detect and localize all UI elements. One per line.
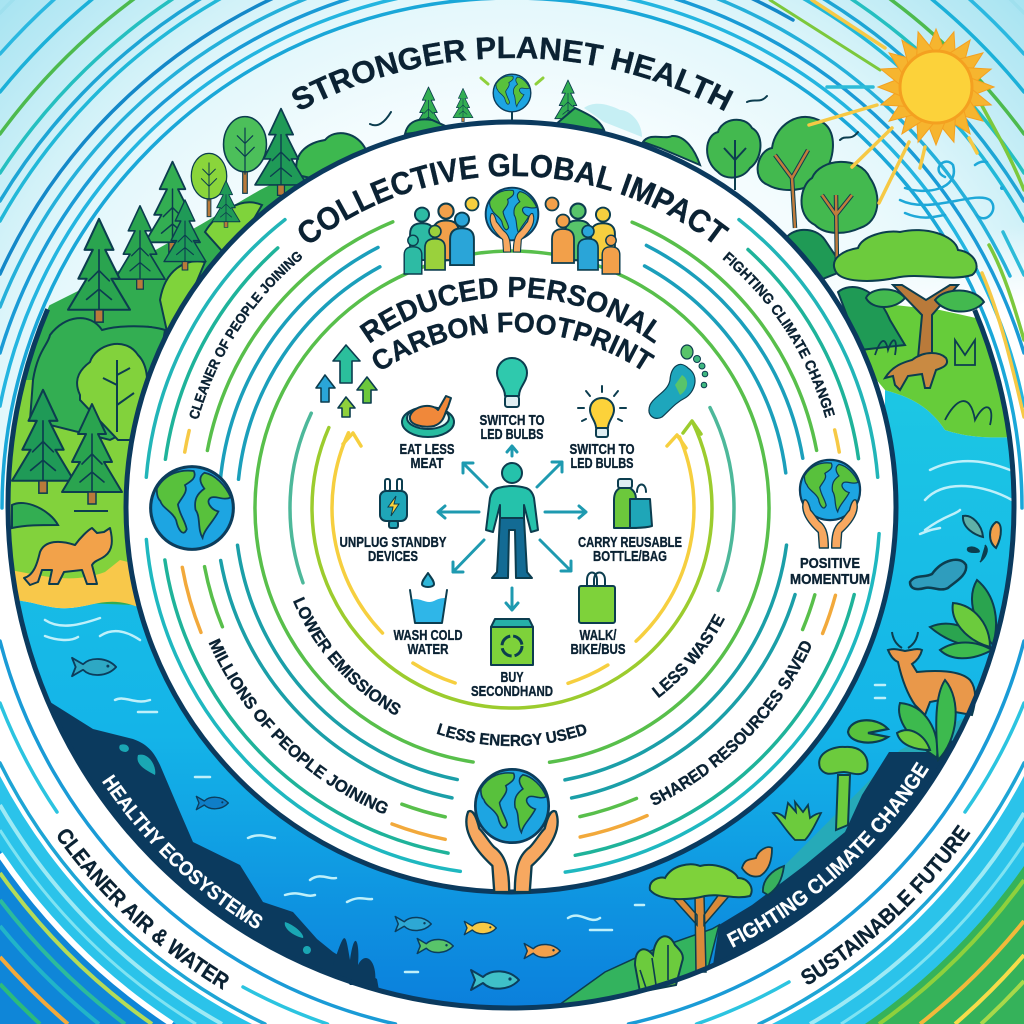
arc arrowheads — [343, 421, 701, 448]
label: carry reusable bottle/bag: CARRY REUSABLE — [578, 534, 682, 551]
label: eat less meat: MEAT — [410, 455, 444, 472]
icon: person — [486, 463, 538, 578]
sand shore — [14, 560, 136, 608]
lily pad — [848, 720, 888, 743]
label: switch to led bulbs right: SWITCH TO — [570, 441, 635, 458]
mushroom tree — [836, 775, 850, 830]
ring label: cleaner air and water: CLEANER AIR & WATER — [58, 829, 229, 990]
seaweed — [333, 938, 375, 985]
icon: top globe on tree — [481, 74, 543, 122]
acacia bottom — [670, 890, 730, 972]
land right slope — [760, 718, 964, 890]
forest base — [20, 178, 306, 605]
right wildlife and plants — [24, 516, 1001, 992]
upper leaves — [930, 580, 996, 658]
water — [0, 390, 1024, 1024]
label: switch to led bulbs right: LED BULBS — [570, 455, 634, 472]
label: walk bike bus: BIKE/BUS — [570, 641, 626, 658]
label: wash cold water — [394, 627, 463, 658]
label: positive momentum: MOMENTUM — [790, 571, 870, 588]
ring label: lower emissions: LOWER EMISSIONS — [293, 596, 401, 715]
meadow lime base — [10, 380, 130, 578]
acacia tree — [893, 285, 958, 358]
marine shapes — [963, 516, 983, 537]
label: wash cold water: WASH COLD — [394, 627, 463, 644]
right trees — [707, 117, 991, 425]
animal: big cat — [24, 528, 112, 585]
right bush — [643, 136, 700, 165]
label: unplug standby devices — [340, 534, 446, 565]
icon: green shopping bag — [579, 572, 615, 623]
label: buy secondhand: BUY — [500, 669, 524, 686]
label: switch to led bulbs center: SWITCH TO — [480, 412, 545, 429]
bottom bush — [635, 936, 683, 992]
label: buy secondhand: SECONDHAND — [471, 683, 553, 700]
inner white disk — [126, 122, 896, 892]
ring label: fighting climate change: FIGHTING CLIMATE CHANGE — [722, 251, 835, 418]
label: carry reusable bottle/bag — [578, 534, 682, 565]
ring label: less energy used: LESS ENERGY USED — [436, 723, 586, 746]
corner: bottom left water streaks — [0, 776, 252, 1024]
icon: sun — [878, 29, 994, 145]
icon: right globe with hands — [800, 460, 860, 548]
heading: carbon footprint: CARBON FOOTPRINT — [372, 312, 656, 370]
heading: stronger planet health: STRONGER PLANET HEALTH — [292, 36, 734, 111]
sun rays and wind — [809, 87, 1004, 218]
pale cloud — [584, 104, 642, 137]
heading: reduced personal: REDUCED PERSONAL — [359, 276, 657, 344]
label: positive momentum — [790, 555, 870, 588]
label: carry reusable bottle/bag: BOTTLE/BAG — [593, 548, 667, 565]
icon: left globe — [151, 467, 233, 549]
lower leaves — [897, 680, 956, 760]
navy band right — [713, 740, 952, 963]
ring label: fighting climate change white: FIGHTING CLIMATE CHANGE — [726, 762, 929, 948]
forest trees — [12, 80, 700, 528]
ring label: millions of people joining: MILLIONS OF PEOPLE JOINING — [208, 638, 388, 814]
label: unplug standby devices: UNPLUG STANDBY — [340, 534, 446, 551]
river streaks — [925, 461, 1012, 530]
label: unplug standby devices: DEVICES — [368, 548, 418, 565]
ring label: cleaner of people joining: CLEANER OF PEOPLE JOINING — [190, 252, 302, 419]
label: walk bike bus — [570, 627, 626, 658]
dark bushes — [785, 230, 905, 350]
icon: bottom globe with hands — [466, 769, 558, 892]
grass tufts — [875, 340, 991, 425]
water waves — [45, 528, 940, 972]
heading: collective global impact: COLLECTIVE GLOBAL IMPACT — [298, 154, 730, 243]
plant — [773, 802, 821, 840]
animal: capybara — [885, 353, 947, 390]
bottom land — [560, 924, 720, 1004]
icon: large led bulb — [497, 358, 527, 407]
birds — [370, 96, 858, 140]
sky rings — [0, 0, 1024, 508]
label: positive momentum: POSITIVE — [800, 555, 860, 572]
bushes — [296, 133, 372, 180]
river teal blobs — [119, 744, 311, 954]
ring label: shared resources saved: SHARED RESOURCES SAVED — [650, 641, 811, 805]
icon: meat plate — [402, 396, 454, 437]
mid crown — [30, 318, 165, 440]
people group with globe — [404, 188, 620, 274]
label: switch to led bulbs center — [480, 412, 545, 443]
icon: rising arrows — [316, 345, 377, 417]
ring label: less waste: LESS WASTE — [652, 614, 725, 698]
label: switch to led bulbs right — [570, 441, 635, 472]
icon: bottle and bag — [614, 479, 652, 528]
flower — [742, 847, 772, 877]
label: buy secondhand — [471, 669, 553, 700]
animal: deer — [888, 632, 975, 715]
left shrub — [12, 503, 58, 528]
navy band left — [51, 702, 378, 988]
fish group — [72, 658, 116, 676]
icon: secondhand box — [491, 619, 533, 665]
ring label: healthy ecosystems: HEALTHY ECOSYSTEMS — [102, 774, 262, 928]
label: eat less meat: EAT LESS — [400, 441, 454, 458]
label: eat less meat — [400, 441, 454, 472]
label: switch to led bulbs center: LED BULBS — [480, 426, 544, 443]
bushes along top — [405, 108, 604, 134]
icon: water cup — [410, 573, 447, 623]
label: wash cold water: WATER — [408, 641, 449, 658]
icon: plug — [380, 479, 407, 528]
icon: footprint — [649, 345, 708, 418]
lower pines — [12, 390, 74, 493]
action arrows — [438, 446, 586, 610]
corner: bottom right green streaks — [772, 776, 1024, 1024]
lower white band rings — [0, 641, 1024, 1024]
label: walk bike bus: WALK/ — [580, 627, 617, 644]
ring label: sustainable future: SUSTAINABLE FUTURE — [801, 824, 970, 984]
right grass — [866, 305, 1007, 438]
icon: yellow bulb — [578, 386, 626, 437]
lime tree — [77, 344, 147, 440]
